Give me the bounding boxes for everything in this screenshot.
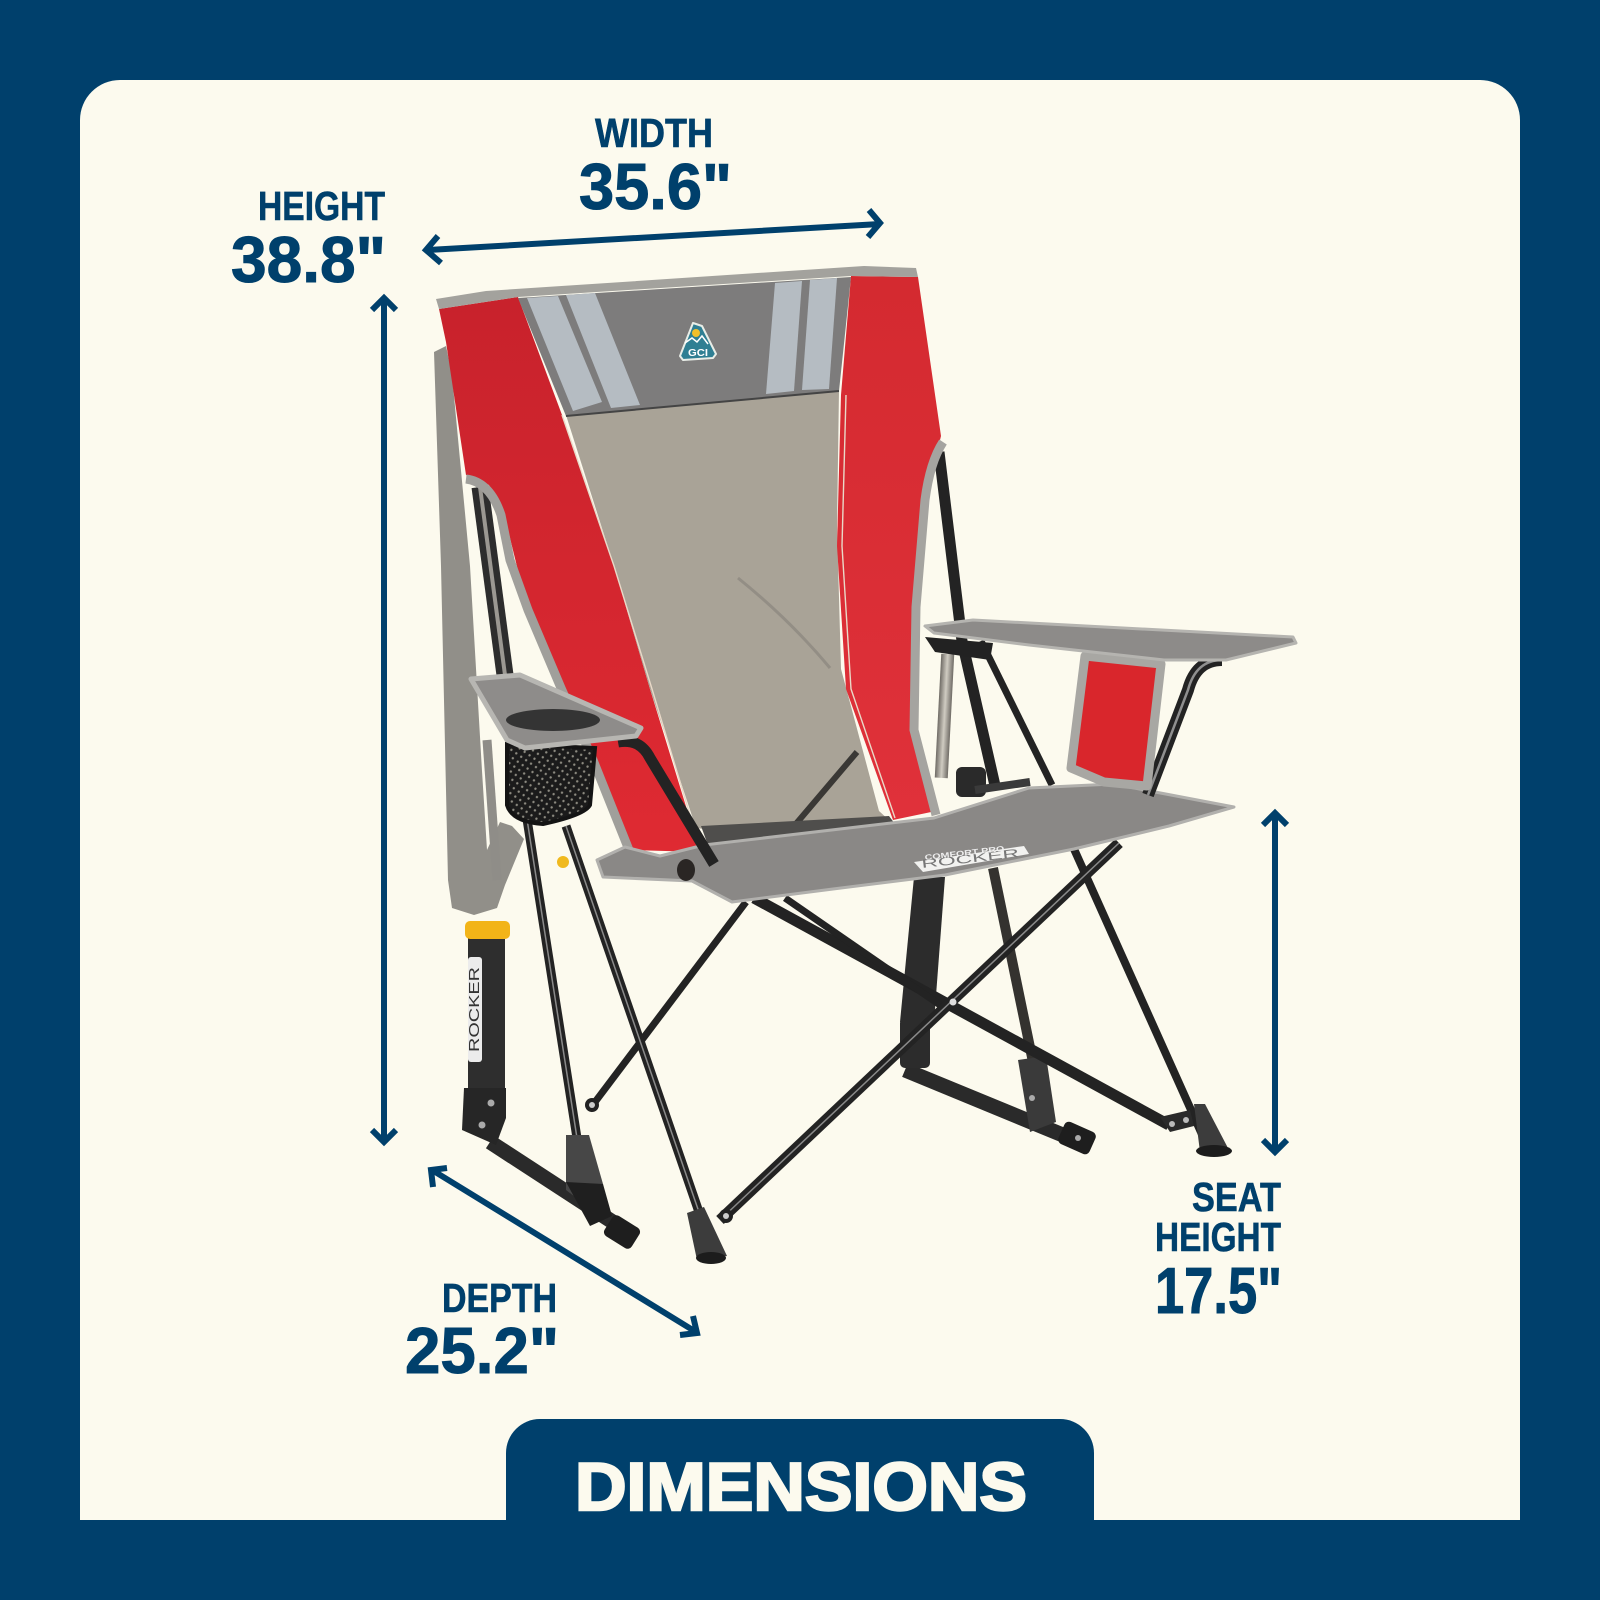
seat label: COMFORT PRO <box>924 844 1005 862</box>
chair back: left red panel <box>439 297 700 852</box>
seat height arrow <box>1263 813 1287 1152</box>
width label: 35.6" <box>579 150 732 223</box>
rear rocker base <box>900 1018 1097 1156</box>
stitching on right panel <box>842 395 895 818</box>
top binding <box>436 266 918 309</box>
seat height label: 17.5" <box>1155 1254 1282 1327</box>
thin cross strut <box>585 902 746 1112</box>
height arrow <box>372 298 396 1142</box>
rocker cylinder with label: ROCKER <box>466 967 483 1052</box>
dimensions tab <box>506 1419 1094 1525</box>
cup holder mesh basket <box>507 744 595 824</box>
seat height label: SEAT <box>1192 1174 1281 1220</box>
cup hole <box>506 709 600 731</box>
reflective stripes <box>527 278 837 411</box>
seat label: ROCKER <box>921 846 1020 871</box>
left back frame tubes <box>480 487 505 880</box>
depth label <box>405 1275 559 1387</box>
left rocker base <box>490 1135 642 1251</box>
height label: 38.8" <box>231 223 386 296</box>
right armrest <box>925 620 1296 660</box>
height label <box>231 183 386 296</box>
rear right leg <box>993 868 1040 1096</box>
seat height label <box>1155 1174 1282 1327</box>
right arm tube <box>1148 660 1222 795</box>
brace seen through mesh <box>795 752 857 825</box>
left armrest tube <box>618 741 714 864</box>
cross brace running to front <box>719 843 1119 1223</box>
right front leg <box>1074 849 1232 1157</box>
yellow knob <box>557 856 569 868</box>
rear centre post <box>900 877 945 1022</box>
GCI badge: GCI <box>688 347 708 359</box>
width arrow <box>426 210 880 263</box>
side pouch <box>1071 656 1161 786</box>
rocker cylinder with label <box>462 921 510 1145</box>
depth arrow <box>431 1168 697 1335</box>
width label <box>579 110 732 223</box>
seat zipper strip <box>701 816 895 848</box>
seat label <box>914 844 1029 872</box>
GCI badge <box>680 323 716 360</box>
seat height label: HEIGHT <box>1155 1214 1281 1260</box>
chair illustration <box>434 266 1296 1264</box>
shoulder strap <box>434 346 524 915</box>
chair back: taupe mesh <box>566 390 900 835</box>
right back frame tubes <box>925 452 1052 797</box>
left armrest <box>471 675 641 748</box>
right trim edge <box>914 442 943 815</box>
height label: HEIGHT <box>258 183 385 229</box>
dimensions heading: DIMENSIONS <box>575 1449 1027 1525</box>
width label: WIDTH <box>595 110 713 156</box>
left rear leg <box>524 800 577 1138</box>
left front leg <box>566 826 727 1264</box>
depth label: 25.2" <box>405 1314 559 1387</box>
cross brace running to rear <box>754 898 1194 1132</box>
depth label: DEPTH <box>442 1275 557 1321</box>
seat <box>597 784 1234 902</box>
chair back: right red panel <box>837 276 941 820</box>
left trim edge <box>466 479 629 850</box>
chair back: top panel <box>518 277 851 416</box>
seat tube gap <box>677 859 695 881</box>
mesh wrinkle <box>738 578 830 668</box>
stitching on left panel <box>562 415 700 848</box>
